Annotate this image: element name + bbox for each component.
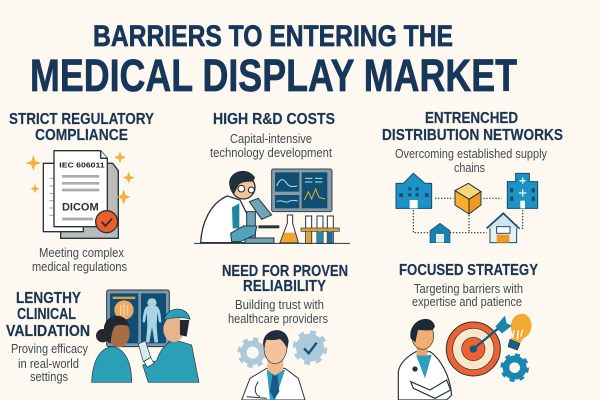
panel: entrenched distribution networks bbox=[382, 110, 563, 243]
description: high R&D costs: technology development bbox=[210, 145, 332, 160]
description: focused strategy bbox=[412, 281, 523, 309]
panel: strict regulatory compliance bbox=[9, 111, 154, 274]
description: strict regulatory compliance: medical regulations bbox=[32, 259, 127, 274]
heading: entrenched distribution networks: ENTRENCHED bbox=[425, 110, 518, 127]
description: lengthy clinical validation: in real-world bbox=[18, 356, 79, 371]
icon: compliance documents: IEC 606011 bbox=[59, 161, 105, 170]
icon: clinicians reviewing scan bbox=[92, 290, 199, 382]
description: need for proven reliability: healthcare providers bbox=[228, 311, 328, 326]
heading: lengthy clinical validation: VALIDATION bbox=[6, 323, 90, 340]
heading: strict regulatory compliance bbox=[9, 111, 154, 144]
heading: entrenched distribution networks bbox=[382, 110, 563, 144]
description: lengthy clinical validation: Proving efficacy bbox=[11, 341, 88, 356]
icon: scientist at microscope bbox=[194, 169, 350, 243]
description: entrenched distribution networks: Overcoming established supply bbox=[395, 146, 547, 161]
description: focused strategy: Targeting barriers with bbox=[414, 281, 523, 296]
heading: entrenched distribution networks: DISTRIBUTION NETWORKS bbox=[382, 127, 563, 144]
panel: high R&D costs bbox=[194, 111, 350, 243]
description: focused strategy: expertise and patience bbox=[412, 294, 522, 309]
heading: lengthy clinical validation bbox=[6, 290, 90, 340]
panel: lengthy clinical validation bbox=[6, 290, 199, 384]
description: high R&D costs bbox=[210, 131, 332, 160]
icon: distribution network bbox=[396, 173, 538, 243]
heading: need for proven reliability bbox=[222, 263, 348, 295]
description: lengthy clinical validation: settings bbox=[30, 369, 68, 384]
description: need for proven reliability bbox=[228, 297, 328, 326]
heading: strict regulatory compliance: STRICT REGULATORY bbox=[9, 111, 154, 128]
heading: need for proven reliability: NEED FOR PROVEN bbox=[222, 263, 348, 280]
description: lengthy clinical validation bbox=[11, 341, 88, 384]
title bbox=[30, 20, 517, 101]
icon: compliance documents bbox=[25, 151, 135, 238]
description: entrenched distribution networks: chains bbox=[454, 160, 485, 175]
description: strict regulatory compliance bbox=[32, 245, 127, 274]
description: need for proven reliability: Building trust with bbox=[235, 297, 324, 312]
heading: lengthy clinical validation: LENGTHY bbox=[16, 290, 81, 307]
icon: doctor with gears bbox=[239, 330, 325, 400]
heading: high R&D costs: HIGH R&D COSTS bbox=[213, 111, 335, 128]
icon: doctor with target and gear bbox=[398, 314, 532, 400]
description: high R&D costs: Capital-intensive bbox=[230, 131, 312, 146]
heading: focused strategy: FOCUSED STRATEGY bbox=[399, 262, 538, 279]
description: entrenched distribution networks bbox=[395, 146, 547, 175]
heading: need for proven reliability: RELIABILITY bbox=[243, 278, 326, 295]
panel: focused strategy bbox=[398, 262, 538, 400]
heading: strict regulatory compliance: COMPLIANCE bbox=[35, 127, 128, 144]
title: BARRIERS TO ENTERING THE bbox=[93, 20, 453, 53]
heading: lengthy clinical validation: CLINICAL bbox=[17, 306, 76, 323]
panel: need for proven reliability bbox=[222, 263, 348, 400]
description: strict regulatory compliance: Meeting complex bbox=[39, 245, 124, 260]
icon: compliance documents: DICOM bbox=[62, 202, 99, 214]
